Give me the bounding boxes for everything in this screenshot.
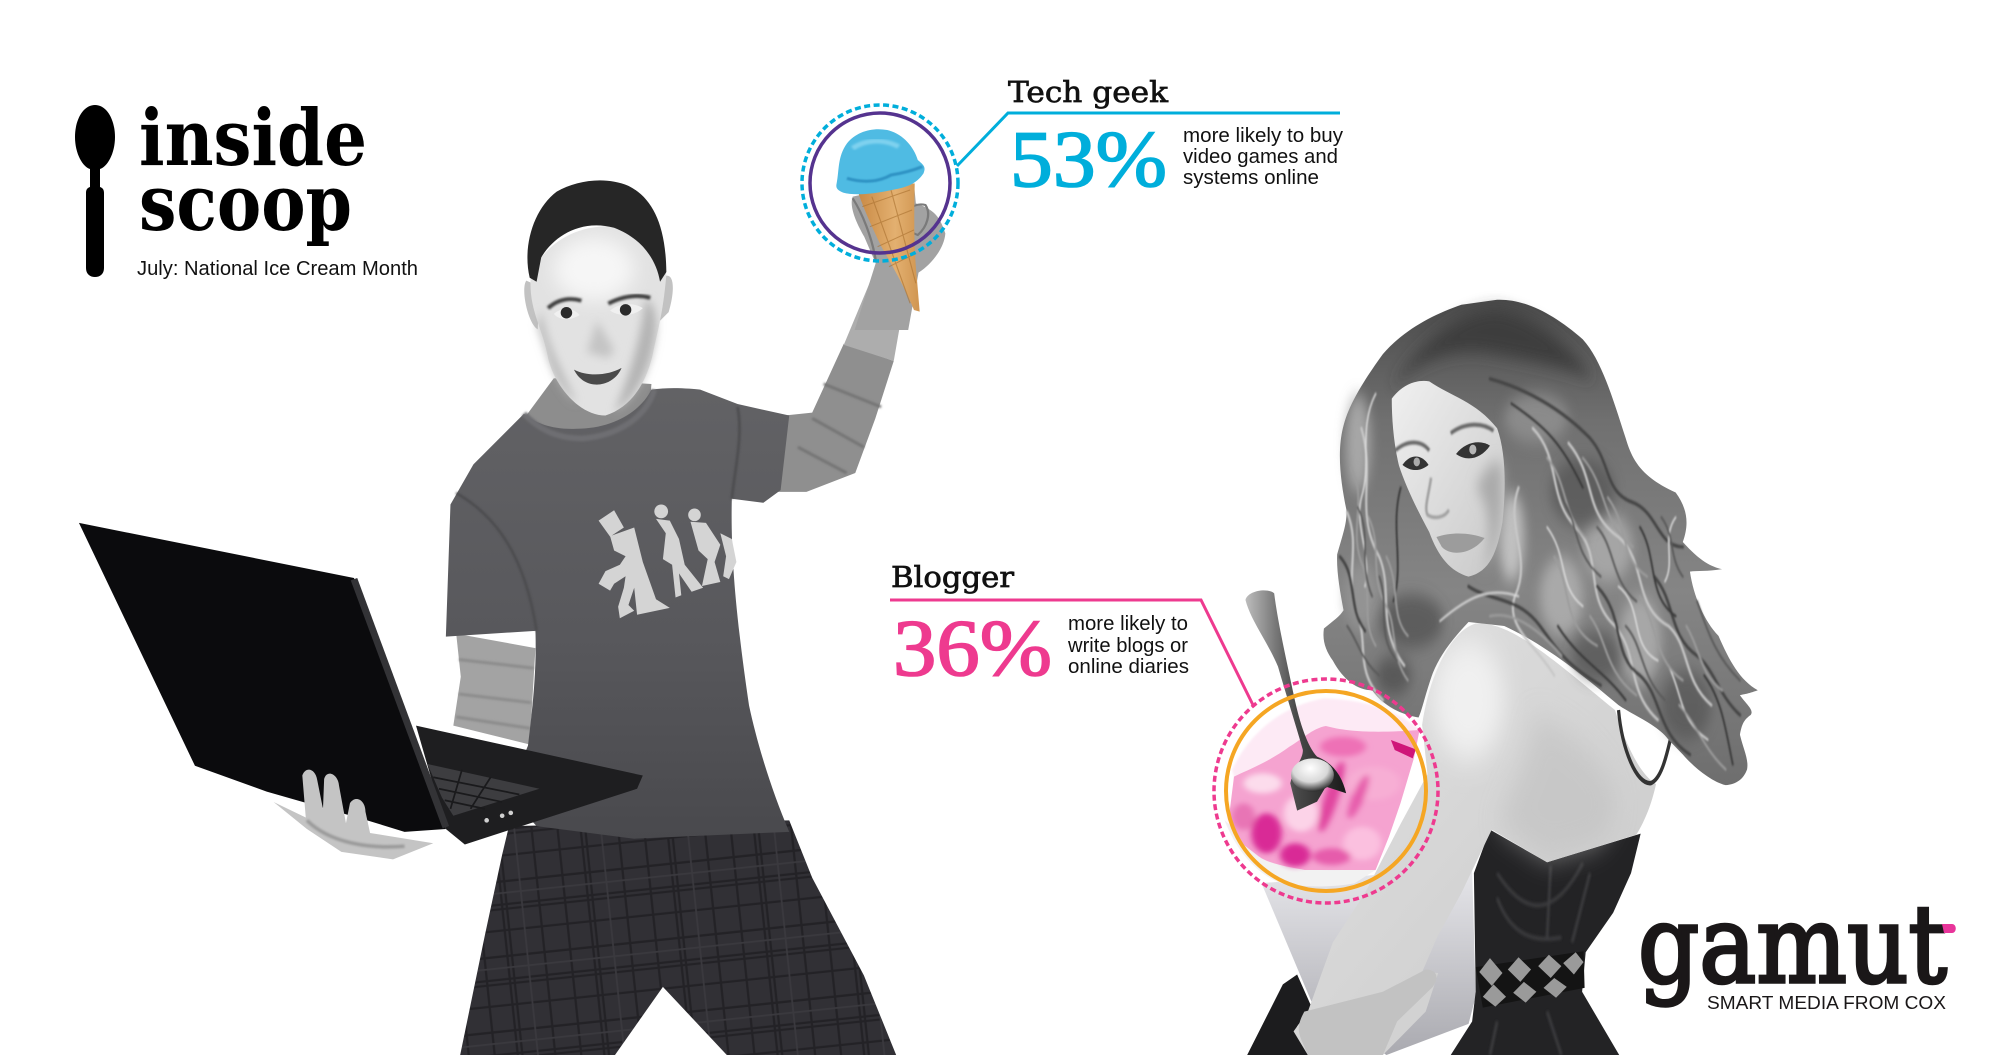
laptop lid <box>79 523 446 832</box>
sleeve seam <box>456 407 739 631</box>
shoulder highlight <box>1433 641 1504 759</box>
leader line <box>890 600 1254 707</box>
title: scoop <box>139 158 352 249</box>
tagline: SMART MEDIA FROM COX <box>1707 992 1946 1013</box>
spoon <box>1245 590 1346 811</box>
hair <box>1323 300 1758 785</box>
description <box>1183 125 1343 189</box>
hair top dark shading <box>1390 310 1594 389</box>
nose <box>1426 478 1449 517</box>
hair dark lower <box>1376 458 1711 740</box>
face shading <box>614 298 656 413</box>
description: more likely to buy <box>1183 125 1343 147</box>
illustration: woman with ice cream cup <box>1247 300 1758 1055</box>
laptop <box>79 523 643 844</box>
title <box>139 93 367 249</box>
hair highlights <box>1345 394 1661 685</box>
heading: Tech geek <box>1008 75 1168 109</box>
necklace strap <box>1619 710 1670 783</box>
heading: Blogger <box>891 560 1014 594</box>
illustration: man with laptop <box>79 180 910 1055</box>
blue dashed ring <box>802 105 958 261</box>
keyboard <box>427 764 539 816</box>
ice cream cone <box>836 129 925 312</box>
title: inside <box>139 93 367 184</box>
description: systems online <box>1183 167 1319 189</box>
neck <box>526 378 651 436</box>
back and arm <box>1294 623 1656 1055</box>
percentage: 36% <box>893 605 1052 693</box>
blue scoop <box>836 129 925 194</box>
forehead highlight <box>554 238 634 301</box>
lid edge <box>354 579 446 827</box>
description: online diaries <box>1068 656 1189 678</box>
ports <box>487 813 511 820</box>
ears <box>524 276 673 329</box>
description: more likely to <box>1068 613 1188 635</box>
cup <box>1261 868 1476 1055</box>
purple ring <box>810 113 950 253</box>
bowl rim <box>1224 820 1376 886</box>
laptop base <box>416 726 643 844</box>
logo: gamut <box>1638 883 1956 1013</box>
face shading <box>1476 462 1503 572</box>
callout: tech geek <box>802 75 1343 330</box>
icon: spoon <box>75 105 115 277</box>
collar <box>524 390 654 438</box>
belt <box>1476 951 1585 1008</box>
leader line <box>957 113 1340 166</box>
lips <box>1436 533 1485 553</box>
raised forearm <box>844 269 910 361</box>
ice cream swirls <box>1232 737 1400 867</box>
description: write blogs or <box>1067 635 1188 657</box>
skirt left <box>1247 974 1311 1055</box>
sleeve folds <box>798 384 881 473</box>
pale ice cream background <box>1232 698 1418 790</box>
eyes and brows <box>548 296 650 319</box>
logo: inside scoop <box>75 93 418 280</box>
description <box>1067 613 1189 678</box>
mouth <box>574 368 622 385</box>
upper sleeve <box>778 344 894 492</box>
trousers <box>459 820 898 1055</box>
callout: blogger <box>890 560 1438 903</box>
t-shirt <box>446 388 789 839</box>
orange ring <box>1226 691 1426 891</box>
dress folds <box>1490 863 1590 1055</box>
ice cream <box>1229 726 1420 870</box>
eyes <box>1395 425 1494 470</box>
back shading <box>1497 715 1616 858</box>
percentage: 53% <box>1010 116 1167 204</box>
subtitle: July: National Ice Cream Month <box>137 258 418 280</box>
illustration: ice cream bowl with spoon <box>1224 590 1420 886</box>
pink dashed ring <box>1214 679 1438 903</box>
pink accent <box>1942 924 1956 933</box>
hand under laptop <box>274 770 433 859</box>
head <box>530 226 666 416</box>
hand on hip <box>1299 970 1437 1055</box>
hair strands <box>1340 379 1740 769</box>
dress <box>1451 830 1641 1055</box>
hair <box>527 180 666 282</box>
hand holding cone <box>852 183 945 330</box>
lower undersleeve <box>453 634 535 745</box>
shirt print: evolution <box>599 505 736 618</box>
face <box>1392 381 1505 577</box>
wordmark: gamut <box>1638 883 1947 1008</box>
sleeve folds lower <box>456 660 534 728</box>
description: video games and <box>1183 146 1338 168</box>
nose <box>587 321 614 358</box>
dark pink accent <box>1391 740 1416 758</box>
